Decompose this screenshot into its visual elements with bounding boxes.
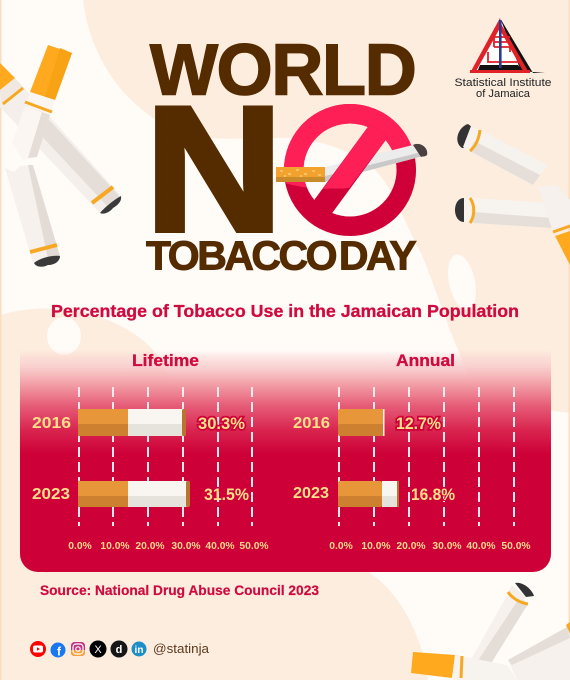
icon: LinkedIn: in	[135, 645, 143, 656]
chart: Annual: 2023	[293, 485, 329, 502]
axis: Annual: 40.0%	[466, 541, 496, 552]
title: TOBACCO DAY: TOBACCO DAY	[146, 232, 416, 278]
chart: Lifetime: 2023	[32, 486, 70, 503]
logo: Statistical Institute of Jamaica	[454, 18, 552, 100]
heading: Percentage of Tobacco Use in the Jamaican Population	[51, 301, 519, 321]
icon: Facebook: f	[57, 644, 62, 658]
social icons and handle	[30, 640, 209, 658]
bar: 2023 Annual 16.8%	[338, 481, 399, 507]
chart: Annual	[293, 352, 531, 552]
decorative cigarettes bottom right	[411, 583, 570, 680]
heading: Lifetime: Lifetime	[132, 352, 199, 370]
chart: Annual: 16.8%	[411, 486, 455, 504]
icon: Facebook	[50, 642, 66, 658]
title: N: N	[145, 70, 283, 268]
icon: X: X	[94, 644, 102, 656]
axis: Lifetime: 20.0%	[135, 541, 165, 552]
icon: LinkedIn	[132, 642, 146, 656]
decorative cigarettes left	[0, 45, 121, 267]
icon: YouTube	[30, 641, 46, 657]
chart: Lifetime: 2016	[32, 415, 71, 432]
logo: Statistical Institute of Jamaica: of Jamaica	[476, 88, 531, 100]
axis: Lifetime: 40.0%	[205, 541, 235, 552]
source: Source: National Drug Abuse Council 2023	[40, 582, 319, 598]
title: WORLD: WORLD	[150, 30, 415, 110]
handle: @statinja	[153, 642, 209, 656]
chart: Lifetime: 31.5%	[204, 486, 249, 504]
axis: Lifetime	[68, 541, 269, 552]
axis: Lifetime: 0.0%	[68, 541, 92, 552]
chart: Annual: 12.7%	[396, 415, 441, 433]
axis: Annual: 50.0%	[501, 541, 531, 552]
logo: Statistical Institute of Jamaica: Statistical Institute	[454, 77, 552, 89]
chart: Lifetime	[32, 352, 269, 552]
axis: Annual	[329, 541, 531, 552]
bar: 2016 Annual 12.7%	[338, 409, 384, 436]
panel: chart background	[20, 350, 551, 572]
axis: Annual: 10.0%	[361, 541, 391, 552]
decorative cigarettes right	[455, 124, 570, 265]
bar: 2023 Lifetime 31.5%	[78, 481, 190, 507]
axis: Annual: 0.0%	[329, 541, 353, 552]
chart: Annual: 2016	[293, 415, 330, 432]
icon: TikTok: d	[116, 644, 122, 656]
bar: 2016 Lifetime 30.3%	[78, 409, 186, 436]
axis: Lifetime: 50.0%	[239, 541, 269, 552]
chart: Lifetime: 30.3%	[198, 415, 245, 433]
heading: Annual: Annual	[396, 352, 455, 370]
axis: Lifetime: 30.0%	[171, 541, 201, 552]
icon: Instagram	[71, 642, 85, 656]
axis: Lifetime: 10.0%	[100, 541, 130, 552]
axis: Annual: 30.0%	[432, 541, 462, 552]
icon: no-smoking sign	[276, 114, 427, 226]
icon: X	[90, 640, 106, 658]
axis: Annual: 20.0%	[396, 541, 426, 552]
icon: TikTok	[110, 640, 128, 658]
